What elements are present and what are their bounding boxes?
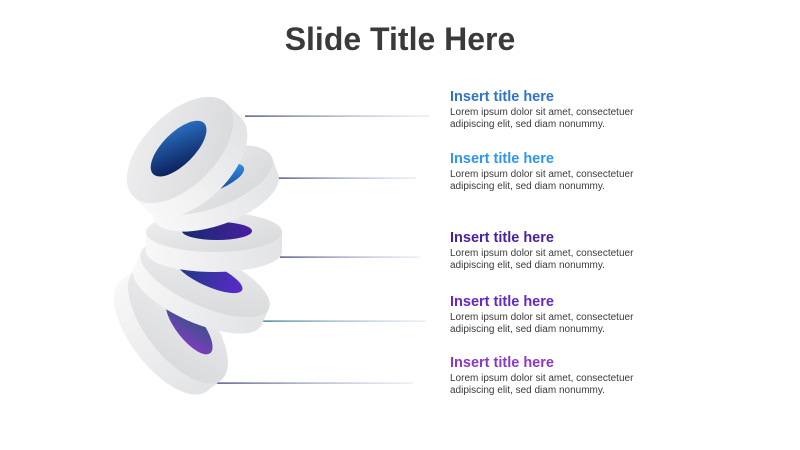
title: Slide Title Here: [285, 21, 515, 57]
text block 4: [450, 294, 634, 335]
text block 4: Insert title here: [450, 294, 554, 310]
text block 4: Lorem ipsum dolor sit amet, consectetuer: [450, 312, 633, 323]
text block 3: adipiscing elit, sed diam nonummy.: [450, 260, 605, 271]
text block 3: Lorem ipsum dolor sit amet, consectetuer: [450, 248, 633, 259]
text block 1: adipiscing elit, sed diam nonummy.: [450, 119, 605, 130]
disc 5: [96, 250, 246, 411]
disc 4: [123, 228, 280, 349]
text block 1: [450, 89, 634, 130]
text block 5: [450, 355, 634, 396]
connector lines: [215, 116, 430, 384]
disc 1: [108, 78, 266, 236]
text block 3: [450, 230, 634, 271]
text block 3: Insert title here: [450, 230, 554, 246]
text block 2: [450, 151, 634, 192]
text block 2: Lorem ipsum dolor sit amet, consectetuer: [450, 169, 633, 180]
text block 1: Insert title here: [450, 89, 554, 105]
text block 2: adipiscing elit, sed diam nonummy.: [450, 181, 605, 192]
text block 5: Lorem ipsum dolor sit amet, consectetuer: [450, 373, 633, 384]
text block 1: Lorem ipsum dolor sit amet, consectetuer: [450, 107, 633, 118]
text block 5: Insert title here: [450, 355, 554, 371]
disc 3: [146, 212, 282, 272]
text block 4: adipiscing elit, sed diam nonummy.: [450, 324, 605, 335]
text block 2: Insert title here: [450, 151, 554, 167]
text block 5: adipiscing elit, sed diam nonummy.: [450, 385, 605, 396]
disc 2: [138, 131, 288, 246]
